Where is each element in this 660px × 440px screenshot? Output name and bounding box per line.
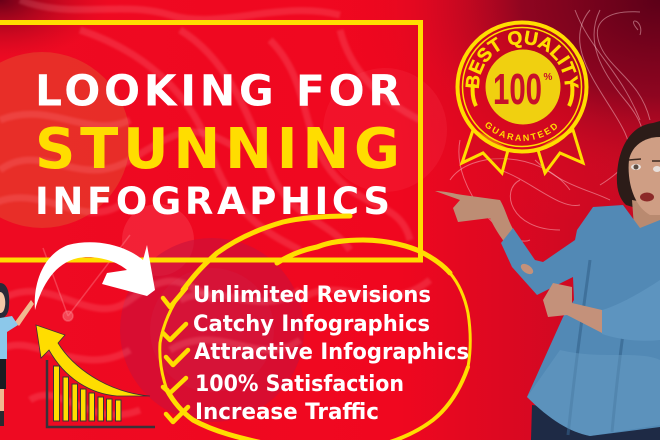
list text xyxy=(193,283,469,425)
checklist xyxy=(163,283,469,425)
list text: Catchy Infographics xyxy=(193,312,430,337)
crossed forearm and hand xyxy=(543,283,602,333)
quality badge xyxy=(456,20,588,176)
title xyxy=(35,68,401,223)
ribbons xyxy=(462,130,583,173)
list text: 100% Satisfaction xyxy=(195,372,404,397)
yellow frame xyxy=(0,22,420,260)
skin gap in sleeve xyxy=(519,262,535,276)
growth bar chart xyxy=(36,325,155,427)
seal disc xyxy=(486,50,560,124)
facial features xyxy=(629,159,660,202)
yellow up arrow xyxy=(36,325,150,396)
jeans xyxy=(531,405,660,440)
seal rings xyxy=(458,22,586,152)
title: INFOGRAPHICS xyxy=(35,180,390,223)
list text: Increase Traffic xyxy=(195,400,379,425)
title: LOOKING FOR xyxy=(35,68,401,116)
side dashes xyxy=(473,84,572,106)
white curved arrow xyxy=(35,242,155,310)
cartoon girl xyxy=(0,283,34,426)
pointing arm skin xyxy=(435,191,515,243)
hand-drawn yellow ellipse xyxy=(160,216,470,440)
chart bars xyxy=(54,366,121,421)
list text: Unlimited Revisions xyxy=(193,283,431,308)
chart axes xyxy=(47,360,155,427)
seal text: BEST QUALITY xyxy=(465,30,579,88)
hair xyxy=(617,121,660,215)
woman pointing xyxy=(435,121,660,440)
quality badge: % xyxy=(544,72,553,83)
face xyxy=(629,137,660,215)
neck xyxy=(632,200,660,240)
check marks xyxy=(163,288,188,422)
rolled sleeve xyxy=(602,280,660,341)
denim shirt xyxy=(501,205,660,436)
list text: Attractive Infographics xyxy=(194,340,469,365)
title: STUNNING xyxy=(35,117,400,182)
quality badge: GUARANTEED xyxy=(486,122,557,142)
quality badge: 100 xyxy=(493,65,542,114)
